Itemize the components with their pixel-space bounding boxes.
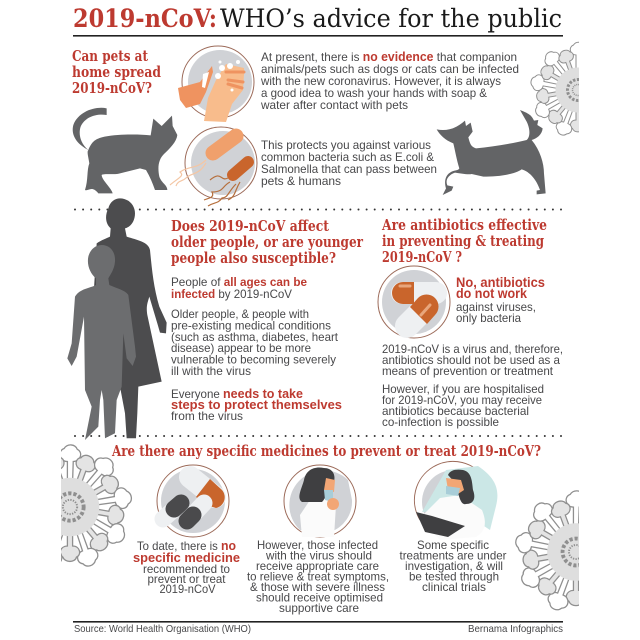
- title: [73, 4, 562, 33]
- text: bacteria: common bacteria such as E.coli &: [261, 150, 434, 164]
- text: older people: from the virus: [171, 409, 243, 423]
- heading: older people: people also susceptible?: [171, 250, 336, 267]
- text: clinical trials: treatments are under: [400, 548, 506, 562]
- icon: dog silhouette: [437, 110, 546, 195]
- text: older people: infected by 2019-nCoV: [171, 287, 292, 301]
- heading: antibiotics: Are antibiotics effective: [381, 217, 547, 234]
- text: clinical trials: Some specific: [417, 538, 489, 552]
- heading: pets: 2019-nCoV?: [72, 80, 152, 97]
- icon: patient in bed: [414, 461, 497, 540]
- icon: pills: [157, 465, 229, 537]
- title: 2019-nCoV:: [73, 4, 217, 33]
- text: no evidence: a good idea to wash your hands with soap &: [261, 86, 487, 100]
- text: no evidence: water after contact with pets: [260, 98, 408, 112]
- text: older people: vulnerable to becoming severely: [171, 352, 336, 366]
- text: antibiotics: No, antibiotics: [456, 275, 545, 290]
- source: Source: World Health Organisation (WHO): [74, 623, 251, 635]
- text: appropriate care: with the virus should: [265, 548, 372, 562]
- text: clinical trials: [400, 538, 506, 594]
- text: no evidence: animals/pets such as dogs or cats can be infected: [261, 62, 519, 76]
- text: no specific medicine: To date, there is no: [137, 538, 236, 553]
- icon: bacteria: [170, 127, 257, 206]
- title: WHO’s advice for the public: [220, 4, 562, 33]
- text: antibiotics: antibiotics because bacterial: [382, 404, 529, 418]
- heading: older people: Does 2019-nCoV affect: [171, 218, 329, 235]
- text: appropriate care: [247, 538, 389, 615]
- text: older people: ill with the virus: [171, 364, 251, 378]
- dotted divider: [75, 435, 563, 437]
- text: antibiotics: only bacteria: [456, 311, 521, 325]
- text: older people: People of all ages can be: [171, 275, 307, 289]
- text: older people: pre-existing medical conditions: [171, 318, 331, 332]
- icon: person coughing: [284, 465, 356, 537]
- text: antibiotics: means of prevention or treatment: [382, 364, 554, 378]
- text: antibiotics: [382, 275, 563, 429]
- text: appropriate care: receive appropriate care: [256, 559, 379, 573]
- text: no specific medicine: 2019-nCoV: [160, 582, 216, 596]
- heading: pets: Can pets at: [72, 48, 148, 65]
- text: older people: [171, 275, 342, 423]
- heading: pets: [72, 48, 161, 97]
- virus: bottom left: [61, 444, 132, 567]
- text: no specific medicine: prevent or treat: [148, 572, 226, 586]
- text: antibiotics: co-infection is possible: [382, 415, 499, 429]
- virus: bottom right: [515, 490, 579, 610]
- text: antibiotics: 2019-nCoV is a virus and, therefore,: [382, 342, 563, 356]
- text: no evidence: [260, 50, 519, 112]
- text: no evidence: with the new coronavirus. However, it is always: [260, 74, 501, 88]
- text: bacteria: pets & humans: [261, 174, 341, 188]
- text: antibiotics: against viruses,: [456, 300, 536, 314]
- heading: older people: older people, or are younger: [171, 234, 363, 251]
- text: bacteria: Salmonella that can pass between: [261, 162, 437, 176]
- icon: washing hands: [178, 46, 254, 122]
- text: older people: steps to protect themselves: [171, 397, 342, 412]
- text: no specific medicine: recommended to: [143, 562, 230, 576]
- text: older people: disease) appear to be more: [171, 341, 311, 355]
- heading: antibiotics: [381, 217, 547, 266]
- text: no specific medicine: specific medicine: [133, 550, 240, 565]
- dotted divider: [75, 208, 563, 210]
- text: older people: Older people, & people with: [171, 307, 309, 321]
- heading: antibiotics: 2019-nCoV ?: [382, 249, 462, 266]
- text: older people: (such as asthma, diabetes, heart: [171, 330, 339, 344]
- text: clinical trials: be tested through: [409, 570, 499, 584]
- heading: medicines: Are there any specific medicines to prevent or treat 2019-nCoV?: [111, 443, 541, 460]
- credit: Bernama Infographics: [468, 623, 563, 635]
- virus: top right: [530, 42, 579, 136]
- heading: pets: home spread: [72, 64, 161, 81]
- icon: capsules: [378, 266, 450, 338]
- heading: older people: [171, 218, 363, 267]
- text: antibiotics: However, if you are hospitalised: [382, 382, 544, 396]
- text: no evidence: At present, there is no evidence that companion: [261, 50, 517, 64]
- text: appropriate care: supportive care: [279, 601, 359, 615]
- text: antibiotics: do not work: [456, 286, 527, 301]
- heading: antibiotics: in preventing & treating: [382, 233, 544, 250]
- text: clinical trials: investigation, & will: [405, 559, 503, 573]
- text: appropriate care: to relieve & treat symptoms,: [247, 570, 389, 584]
- text: antibiotics: for 2019-nCoV, you may receive: [382, 393, 542, 407]
- text: bacteria: This protects you against various: [261, 138, 431, 152]
- text: appropriate care: should receive optimised: [256, 590, 383, 604]
- illustration: adult and child silhouettes: [67, 198, 167, 440]
- icon: cat silhouette: [73, 108, 177, 193]
- text: appropriate care: & those with severe illness: [250, 580, 385, 594]
- text: clinical trials: clinical trials: [422, 580, 486, 594]
- text: antibiotics: antibiotics should not be used as a: [382, 353, 560, 367]
- text: appropriate care: However, those infected: [257, 538, 378, 552]
- text: no specific medicine: [133, 538, 240, 596]
- text: older people: Everyone needs to take: [171, 386, 303, 401]
- text: bacteria: [261, 138, 437, 188]
